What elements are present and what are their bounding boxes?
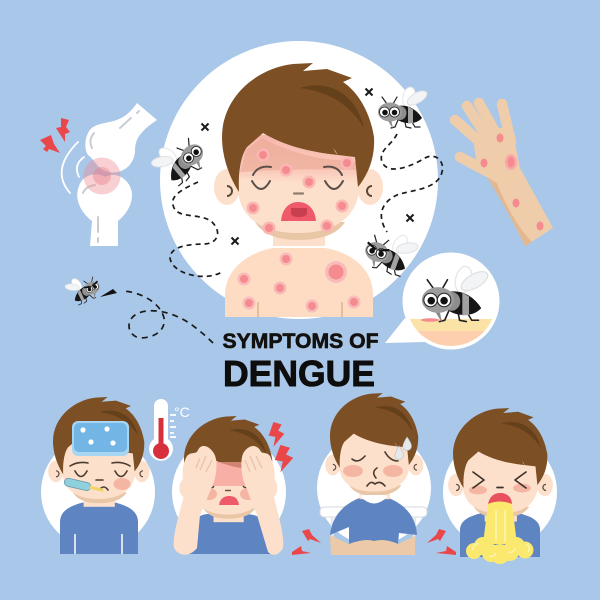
torso rash spots xyxy=(238,252,360,312)
speech bubble xyxy=(385,252,500,350)
mouth xyxy=(488,493,512,505)
dashed flight path: left xyxy=(170,182,222,276)
thermometer body xyxy=(149,399,173,461)
upper bone xyxy=(85,103,157,173)
white circle xyxy=(172,435,286,549)
squeezed eyes xyxy=(473,472,526,488)
nose xyxy=(294,192,303,195)
white circle xyxy=(443,435,557,549)
hair xyxy=(453,408,547,488)
face details xyxy=(70,462,130,490)
mercury xyxy=(153,418,169,459)
shirt xyxy=(330,497,417,544)
pain glow xyxy=(84,158,120,194)
head xyxy=(179,455,277,522)
panel: fever boy xyxy=(41,397,155,554)
title: symptoms of: SYMPTOMS OF xyxy=(222,329,378,353)
dashed trail with arrow xyxy=(100,289,213,343)
rash spots xyxy=(480,134,544,230)
head xyxy=(48,437,150,507)
x marks xyxy=(202,88,414,244)
red pain marks xyxy=(292,529,456,555)
ticks xyxy=(170,415,176,437)
face details xyxy=(352,452,398,486)
dashed flight path: right xyxy=(381,134,443,232)
panel: headache boy xyxy=(172,416,293,555)
hair xyxy=(53,397,144,474)
palm and arm xyxy=(474,128,553,246)
finger lines xyxy=(196,456,262,472)
mosquito: top right xyxy=(378,86,429,129)
skin cross section xyxy=(410,318,492,346)
head xyxy=(448,450,553,522)
face rash spots xyxy=(246,148,354,234)
panel: mosquito bite bubble xyxy=(385,252,500,351)
motion arcs xyxy=(62,142,84,193)
collar xyxy=(360,495,388,504)
mosquito: lower left xyxy=(62,269,104,309)
white circle xyxy=(317,431,431,545)
ice pack xyxy=(72,421,129,456)
face details xyxy=(201,484,256,505)
arm shadow xyxy=(487,177,532,246)
white circle backdrop xyxy=(160,41,438,319)
fingers xyxy=(455,103,511,172)
lower bone xyxy=(77,174,132,246)
panel: vomiting boy xyxy=(443,408,557,564)
panel: main sick boy with rash xyxy=(145,41,443,319)
lightning bolts xyxy=(40,118,70,153)
sweat drops xyxy=(395,437,412,459)
boy head and hair xyxy=(214,63,383,246)
shirt xyxy=(460,513,540,557)
closed eyes and brows xyxy=(252,167,343,189)
chair xyxy=(320,507,427,555)
cheeks xyxy=(469,484,531,494)
panel: nausea and sweating boy xyxy=(292,393,456,555)
mosquito: lower right xyxy=(360,223,423,281)
title: dengue: DENGUE xyxy=(223,353,375,394)
forehead fever band xyxy=(212,462,246,486)
thermometer with degree label xyxy=(149,399,190,461)
lightning bolts xyxy=(269,422,293,472)
crossed arms xyxy=(330,535,415,555)
head xyxy=(325,432,423,499)
shirt xyxy=(60,502,138,554)
white circle xyxy=(41,435,155,549)
degree label: °C xyxy=(174,404,190,420)
mosquito: left xyxy=(145,127,212,193)
shirt xyxy=(187,514,270,554)
cheeks xyxy=(343,465,403,477)
left arm and hand xyxy=(174,446,216,555)
mosquito feeding xyxy=(422,265,491,323)
panel: hand with rash xyxy=(455,103,553,246)
right arm and hand xyxy=(241,446,283,555)
boy torso xyxy=(225,248,373,317)
hair xyxy=(184,416,272,491)
thermometer in mouth xyxy=(64,478,104,494)
vomit stream and cloud xyxy=(466,502,534,564)
hair xyxy=(330,393,418,468)
bone details xyxy=(83,111,139,242)
cheek xyxy=(114,478,130,490)
panel: joint pain xyxy=(40,103,157,246)
open mouth xyxy=(281,202,316,221)
